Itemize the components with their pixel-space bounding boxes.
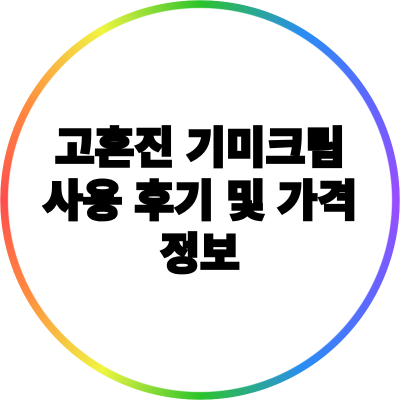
title line 2: 사용 후기 및 가격	[43, 178, 357, 226]
title line 3: 정보	[160, 231, 240, 279]
title line 1: 고혼진 기미크림	[55, 125, 345, 173]
